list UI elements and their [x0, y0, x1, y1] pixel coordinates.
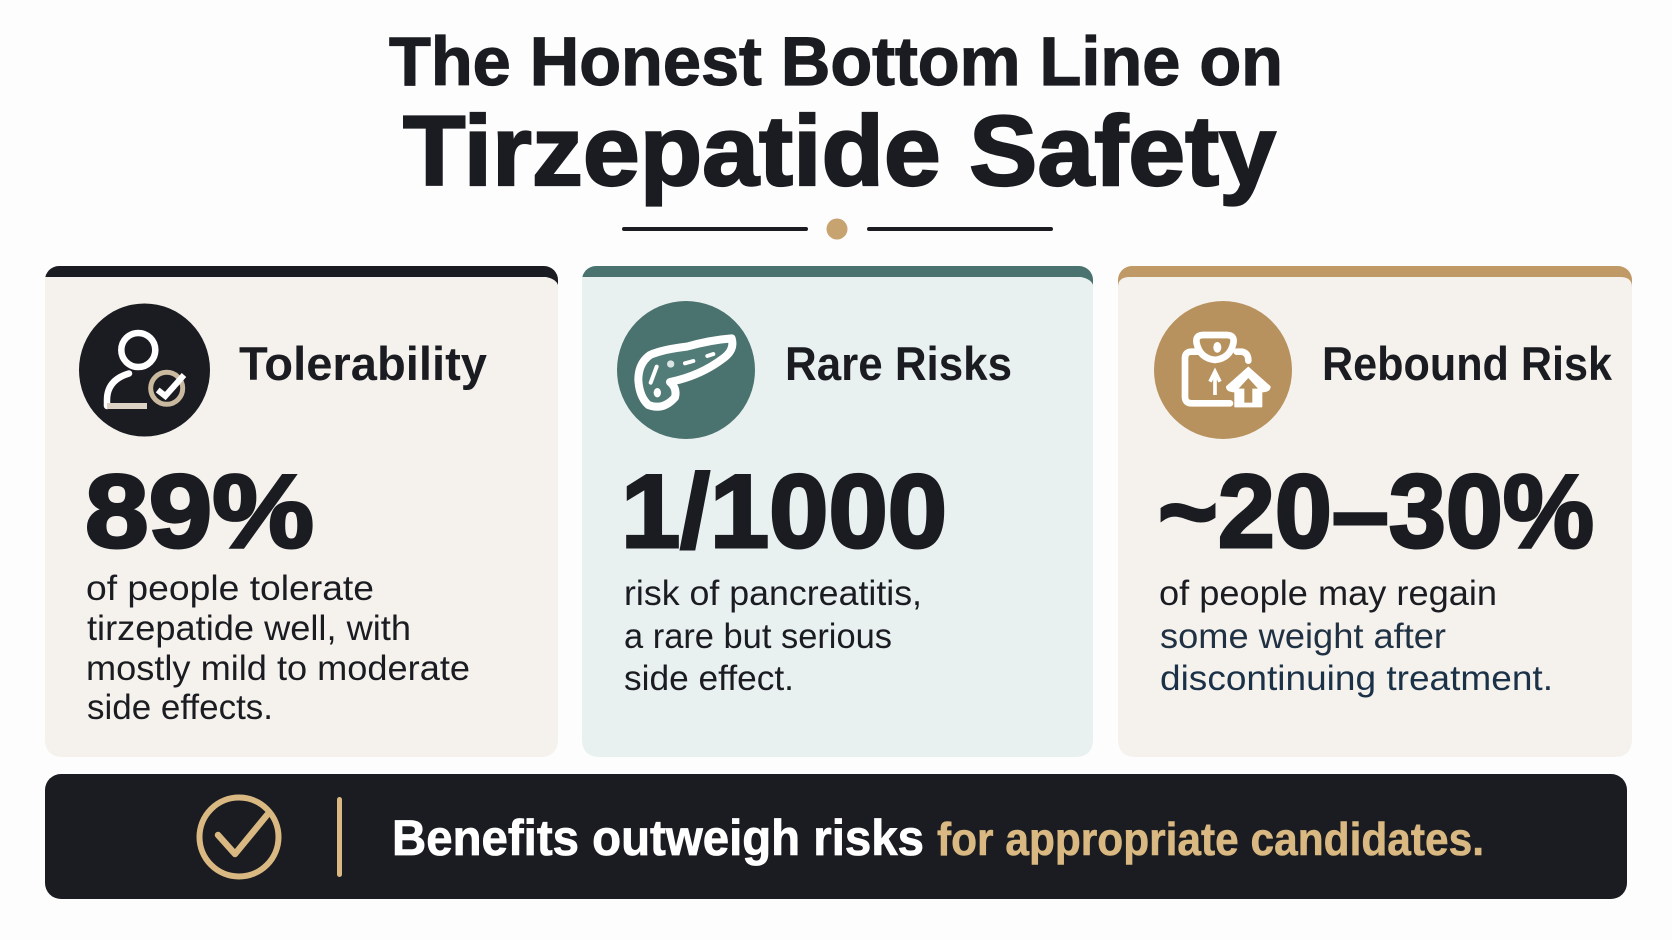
icon: person with check [79, 304, 210, 436]
card accent bar [582, 266, 1093, 306]
stat: 1/1000 [621, 454, 947, 570]
title divider with dot [622, 218, 1053, 240]
description: a rare but serious [624, 617, 892, 656]
callout: bottom line banner [45, 774, 1627, 899]
description: discontinuing treatment. [1160, 659, 1553, 698]
banner text [392, 810, 1484, 866]
description: tirzepatide well, with [87, 609, 411, 648]
card body [1118, 277, 1632, 757]
description: mostly mild to moderate [86, 649, 470, 688]
card accent bar [1118, 266, 1632, 306]
description: side effects. [87, 688, 273, 727]
title: The Honest Bottom Line on [389, 23, 1283, 100]
icon: check circle [200, 798, 278, 876]
card accent bar [45, 266, 558, 306]
panel: rebound risk [1118, 266, 1632, 757]
banner text: for appropriate candidates. [937, 813, 1484, 865]
divider [337, 797, 342, 877]
card body [45, 277, 558, 757]
card body [582, 277, 1093, 757]
panel: tolerability [45, 266, 558, 757]
description: side effect. [624, 659, 794, 698]
stat: ~20–30% [1158, 454, 1594, 570]
title: Tirzepatide Safety [403, 95, 1276, 206]
heading: Rebound Risk [1322, 337, 1613, 390]
heading: Rare Risks [785, 337, 1012, 390]
banner text: Benefits outweigh risks [392, 810, 924, 866]
panel: rare risks [582, 266, 1093, 757]
description: some weight after [1160, 617, 1446, 656]
description: risk of pancreatitis, [624, 574, 922, 613]
icon: pancreas [617, 301, 755, 439]
stat: 89% [85, 454, 314, 570]
icon: scale with up arrow [1154, 301, 1292, 439]
description [86, 569, 470, 727]
description: of people may regain [1159, 574, 1497, 613]
title [389, 23, 1283, 206]
description [1159, 574, 1553, 698]
description: of people tolerate [86, 569, 374, 608]
heading: Tolerability [239, 337, 487, 390]
description [624, 574, 922, 698]
